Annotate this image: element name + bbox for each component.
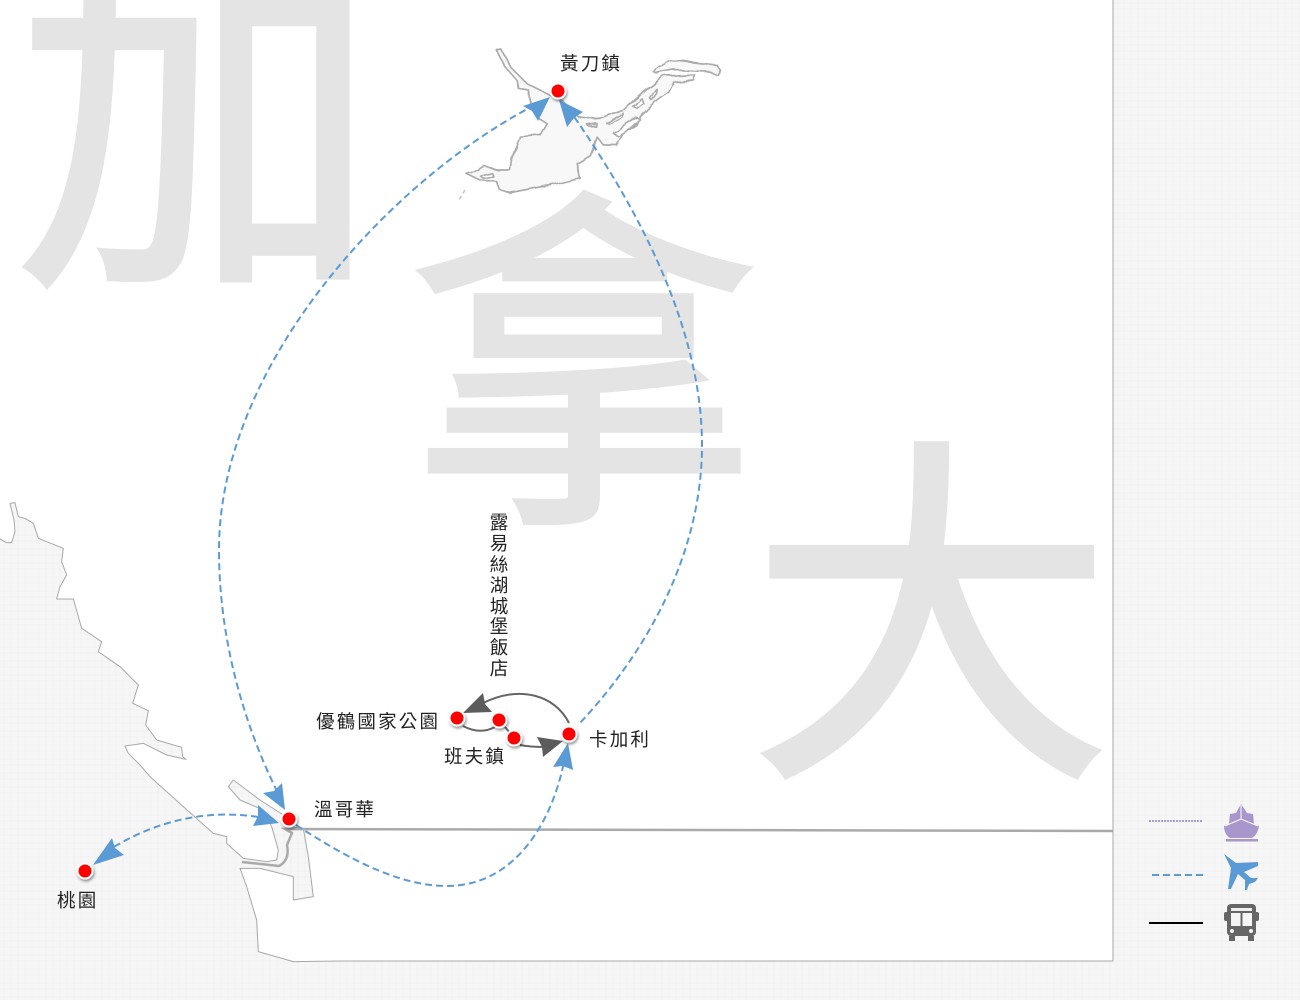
49th parallel border line xyxy=(242,829,1113,866)
icon: ship xyxy=(1224,804,1259,842)
flight route: Taoyuan and Vancouver xyxy=(93,805,279,865)
title characters: 加拿大 xyxy=(16,0,1112,825)
legend: plane line xyxy=(1152,874,1203,876)
legend: bus line xyxy=(1149,922,1203,924)
flight route: Yellowknife to Vancouver xyxy=(219,97,550,810)
location markers xyxy=(78,84,576,878)
icon: bus xyxy=(1224,904,1259,941)
label: Taoyuan: 桃園 xyxy=(57,890,98,911)
flight route: Calgary to Yellowknife xyxy=(559,100,702,725)
bus route: Calgary, Yoho, Banff loop xyxy=(463,693,569,757)
icon: plane xyxy=(1224,854,1258,890)
title characters: 加拿大: 大 xyxy=(750,420,1112,825)
map: Great Slave Lake xyxy=(466,50,720,193)
label: Yellowknife: 黃刀鎮 xyxy=(560,53,622,74)
label: Calgary: 卡加利 xyxy=(589,729,651,750)
flight route: Vancouver to Calgary xyxy=(296,743,573,886)
label: Chateau Lake Louise vertical: 露 xyxy=(490,512,508,533)
label: Vancouver: 溫哥華 xyxy=(314,799,376,820)
label: Chateau Lake Louise vertical: 湖 xyxy=(490,575,508,596)
label: national park: 優鶴國家公園 xyxy=(316,711,440,732)
label: Chateau Lake Louise vertical: 城 xyxy=(490,596,508,617)
legend: ship line xyxy=(1149,820,1203,822)
label: Chateau Lake Louise vertical: 飯 xyxy=(490,637,508,658)
map: small lake fragment xyxy=(459,190,465,200)
legend xyxy=(1149,804,1259,941)
label: Chateau Lake Louise vertical: 店 xyxy=(490,658,508,679)
title characters: 加拿大: 拿 xyxy=(409,178,759,569)
label: Chateau Lake Louise vertical: 堡 xyxy=(490,616,508,637)
label: Chateau Lake Louise vertical: 絲 xyxy=(490,554,508,575)
label: Banff: 班夫鎮 xyxy=(444,746,506,767)
label: Chateau Lake Louise vertical: 易 xyxy=(490,533,508,554)
